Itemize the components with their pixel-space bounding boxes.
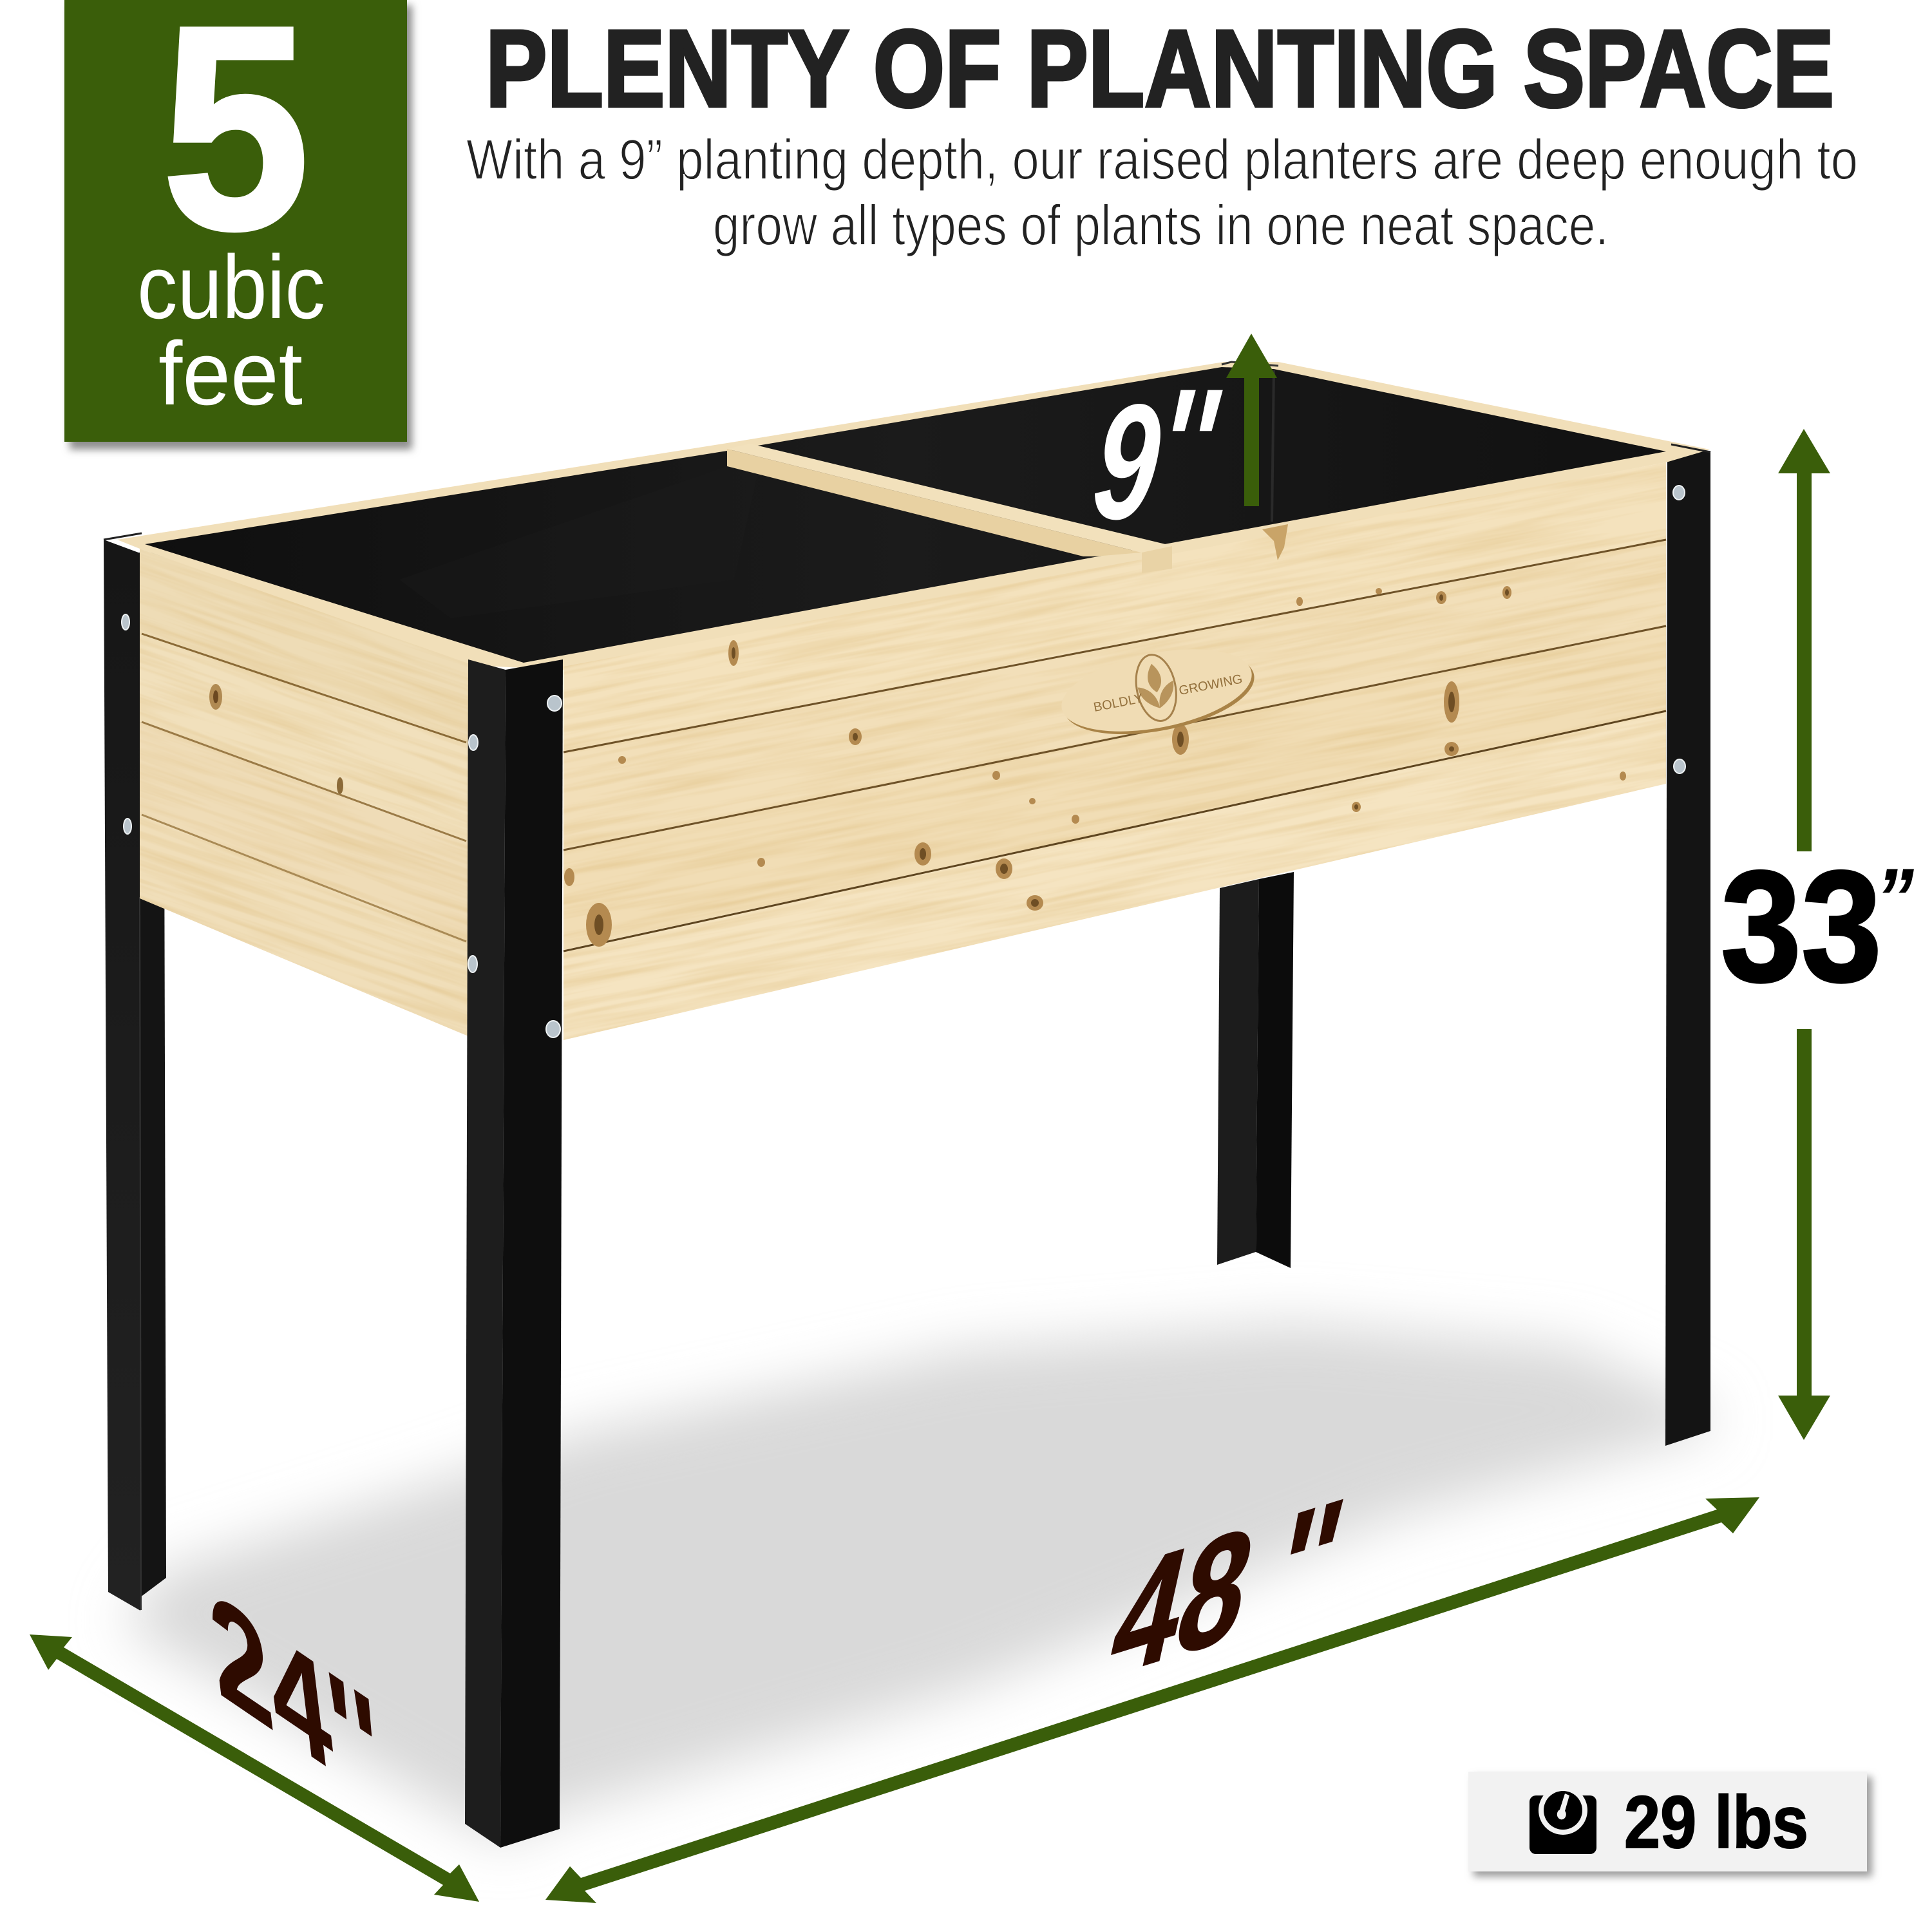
- front corner leg: [465, 659, 563, 1848]
- divider beam: [727, 444, 1173, 556]
- 24 inch width label: 24'': [202, 1556, 390, 1839]
- 33 inch height label: ”: [1875, 851, 1914, 945]
- brand plaque: Boldly Growing: BOLDLY: [1092, 692, 1144, 715]
- 9 inch depth label: 9: [1086, 371, 1196, 554]
- planter side panel: [140, 549, 468, 1036]
- divider beam end: [1142, 546, 1172, 573]
- subtitle: [466, 128, 1858, 257]
- weight badge: [1468, 1772, 1872, 1877]
- 33 inch height label: 33: [1721, 838, 1882, 1014]
- badge unit line two: feet: [158, 323, 303, 424]
- badge unit line one: cubic: [137, 236, 325, 337]
- brand plaque: Boldly Growing: GROWING: [1178, 672, 1244, 698]
- 9 inch depth label: '': [1151, 355, 1226, 538]
- brand plaque: Boldly Growing: [1055, 635, 1261, 748]
- width arrow: [30, 1634, 479, 1902]
- length arrow: [545, 1497, 1759, 1903]
- leg screws: [122, 486, 1685, 1037]
- depth arrow: [1226, 334, 1277, 506]
- subtitle: grow all types of plants in one neat space.: [713, 193, 1609, 257]
- height arrow: [1778, 429, 1830, 1440]
- icon: weighing scale: [1530, 1786, 1596, 1854]
- 48 inch length label: 48 '': [1097, 1464, 1356, 1711]
- volume badge: [64, 0, 412, 450]
- back left leg: [104, 540, 166, 1611]
- planter rim: [104, 362, 1710, 670]
- weight text: 29 lbs: [1624, 1781, 1808, 1864]
- floor shadow: [122, 1323, 1713, 1842]
- back right leg: [1217, 872, 1294, 1268]
- planter interior liner: [145, 367, 1666, 663]
- planter front panel: [563, 462, 1667, 1040]
- far right leg: [1665, 451, 1710, 1446]
